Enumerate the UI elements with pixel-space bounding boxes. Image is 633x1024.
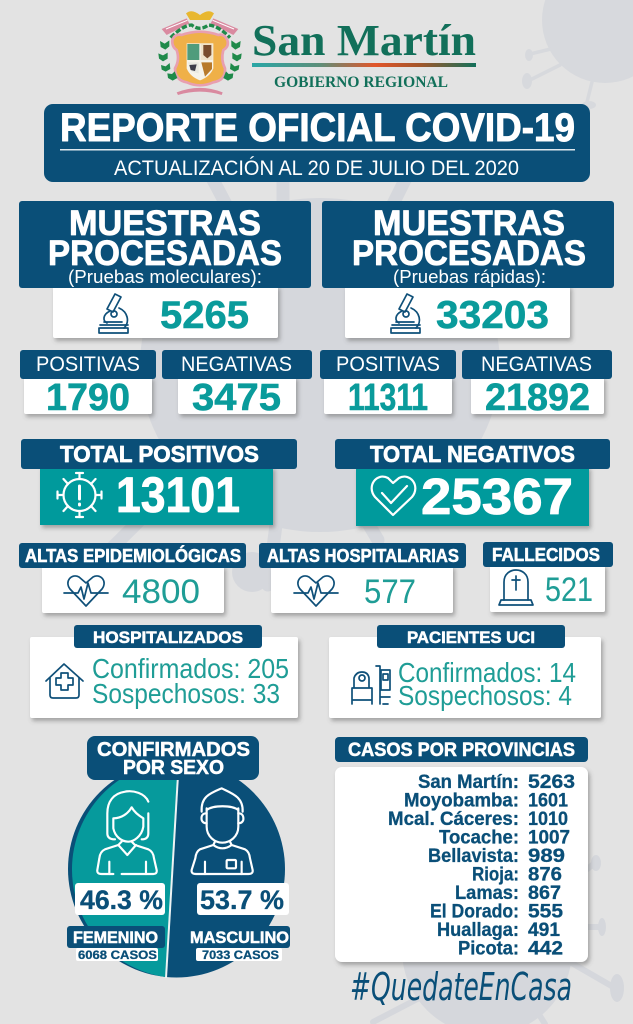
- logo: regional crest: [158, 5, 242, 95]
- crest ribbons: [162, 5, 238, 95]
- panel: muestras rapidas: [322, 201, 614, 338]
- title panel: REPORTE OFICIAL COVID-19: [60, 106, 575, 150]
- province list: 867: [528, 882, 561, 904]
- heading: confirmados por sexo: CONFIRMADOS: [97, 739, 250, 761]
- province list: 989: [528, 845, 565, 867]
- panel: pacientes uci: PACIENTES UCI: [407, 629, 535, 647]
- panel: muestras moleculares: MUESTRAS: [69, 204, 261, 243]
- panel: total positivos: [21, 439, 297, 525]
- panel: hospitalizados: [30, 625, 298, 718]
- panel: muestras moleculares: PROCESADAS: [48, 234, 282, 273]
- province list: Tocache:: [439, 826, 519, 848]
- province list: Rioja:: [472, 864, 519, 886]
- province list: Moyobamba:: [404, 790, 519, 812]
- panel: muestras moleculares: 5265: [160, 294, 249, 337]
- icon: microscope: [99, 294, 128, 333]
- crest leaves: [158, 40, 242, 81]
- icon: icu bed: [352, 666, 390, 704]
- panel: muestras moleculares: [19, 201, 311, 338]
- icon: heart pulse: [294, 576, 338, 606]
- title panel: [44, 104, 590, 182]
- stat: negativas rapidas: 21892: [485, 377, 590, 419]
- province list: 876: [528, 864, 562, 886]
- femenino stats: 6068 CASOS: [78, 948, 157, 962]
- panel: total positivos: TOTAL POSITIVOS: [60, 441, 259, 467]
- province list: 1601: [528, 790, 568, 812]
- panel: altas epidemiologicas: ALTAS EPIDEMIOLÓGICAS: [25, 545, 241, 566]
- panel: pacientes uci: Confirmados: 14: [398, 657, 576, 688]
- panel: hospitalizados: Confirmados: 205: [92, 653, 289, 684]
- stat: negativas moleculares: 3475: [192, 377, 281, 419]
- logo: San Martín wordmark: San Martín: [252, 16, 476, 65]
- stat: positivas moleculares: 1790: [46, 377, 130, 419]
- panel: altas hospitalarias: [259, 543, 466, 613]
- logo: San Martín wordmark: [252, 16, 476, 91]
- logo: San Martín wordmark: GOBIERNO REGIONAL: [274, 74, 448, 91]
- panel: altas epidemiologicas: 4800: [122, 573, 200, 611]
- icon: heart check: [372, 477, 415, 515]
- masculino stats: 7033 CASOS: [202, 948, 279, 962]
- province list: [388, 771, 575, 960]
- panel: altas hospitalarias: ALTAS HOSPITALARIAS: [267, 546, 459, 566]
- panel: muestras rapidas: PROCESADAS: [352, 234, 586, 273]
- province list: 5263: [528, 771, 575, 793]
- stat: negativas rapidas: [462, 350, 612, 419]
- province list: El Dorado:: [430, 900, 519, 922]
- decorative virus: center: [112, 178, 500, 592]
- stat: positivas rapidas: 11311: [348, 377, 428, 419]
- stat: negativas moleculares: NEGATIVAS: [181, 353, 292, 376]
- decorative virus: top right: [522, 0, 633, 109]
- panel: pacientes uci: [329, 625, 601, 718]
- panel: muestras rapidas: 33203: [436, 294, 549, 337]
- stat: negativas rapidas: NEGATIVAS: [481, 353, 592, 376]
- heading: confirmados por sexo: POR SEXO: [123, 757, 224, 779]
- heading: casos por provincias: CASOS POR PROVINCIAS: [348, 740, 575, 761]
- panel: casos por provincias: [335, 737, 588, 962]
- panel: hospitalizados: HOSPITALIZADOS: [93, 629, 243, 647]
- femenino stats: FEMENINO: [73, 928, 158, 947]
- stat: negativas moleculares: [162, 350, 312, 419]
- panel: fallecidos: [483, 542, 613, 612]
- province list: Mcal. Cáceres:: [388, 808, 519, 830]
- panel: muestras rapidas: MUESTRAS: [373, 204, 565, 243]
- stat: positivas rapidas: [320, 350, 456, 419]
- icon: heart pulse: [64, 576, 108, 606]
- crest shield: [172, 32, 228, 85]
- province list: 1010: [528, 808, 568, 830]
- panel: total negativos: [335, 439, 610, 526]
- province list: Bellavista:: [428, 845, 519, 867]
- panel: muestras rapidas: (Pruebas rápidas):: [393, 267, 546, 287]
- femenino stats: [67, 883, 165, 962]
- masculino stats: [189, 883, 290, 962]
- province list: San Martín:: [418, 771, 519, 793]
- pie chart: confirmados por sexo: [67, 736, 290, 978]
- panel: total negativos: TOTAL NEGATIVOS: [370, 441, 575, 467]
- icon: virus alert: [58, 473, 102, 517]
- panel: hospitalizados: Sospechosos: 33: [92, 678, 280, 709]
- panel: altas hospitalarias: 577: [364, 573, 416, 611]
- icon: hospital: [46, 664, 83, 698]
- panel: altas epidemiologicas: [19, 543, 246, 613]
- crest swag: [171, 25, 230, 38]
- pie: circle sectors: [68, 760, 285, 978]
- stat: positivas moleculares: [20, 350, 156, 419]
- province list: 555: [528, 900, 563, 922]
- heading: confirmados por sexo: [87, 736, 259, 780]
- masculino stats: MASCULINO: [190, 928, 289, 947]
- stat: positivas moleculares: POSITIVAS: [36, 353, 140, 376]
- femenino stats: 46.3 %: [80, 885, 163, 915]
- panel: fallecidos: 521: [545, 571, 593, 609]
- icon: man: [192, 788, 253, 874]
- panel: muestras moleculares: (Pruebas moleculares):: [68, 267, 262, 287]
- province list: 1007: [528, 826, 570, 848]
- masculino stats: 53.7 %: [200, 885, 284, 915]
- panel: pacientes uci: Sospechosos: 4: [398, 680, 572, 711]
- icon: microscope: [391, 294, 420, 333]
- stat: positivas rapidas: POSITIVAS: [336, 353, 440, 376]
- province list: Lamas:: [455, 882, 519, 904]
- panel: total positivos: 13101: [116, 467, 240, 523]
- panel: fallecidos: FALLECIDOS: [492, 545, 600, 565]
- icon: woman: [97, 791, 157, 874]
- province list: 491: [528, 919, 560, 941]
- province list: Huallaga:: [437, 919, 519, 941]
- icon: tombstone: [499, 570, 533, 605]
- title panel: ACTUALIZACIÓN AL 20 DE JULIO DEL 2020: [114, 157, 519, 180]
- panel: total negativos: 25367: [421, 468, 573, 525]
- decorative virus: bottom right: [373, 855, 624, 1024]
- province list: 442: [528, 938, 563, 960]
- province list: Picota:: [458, 938, 519, 960]
